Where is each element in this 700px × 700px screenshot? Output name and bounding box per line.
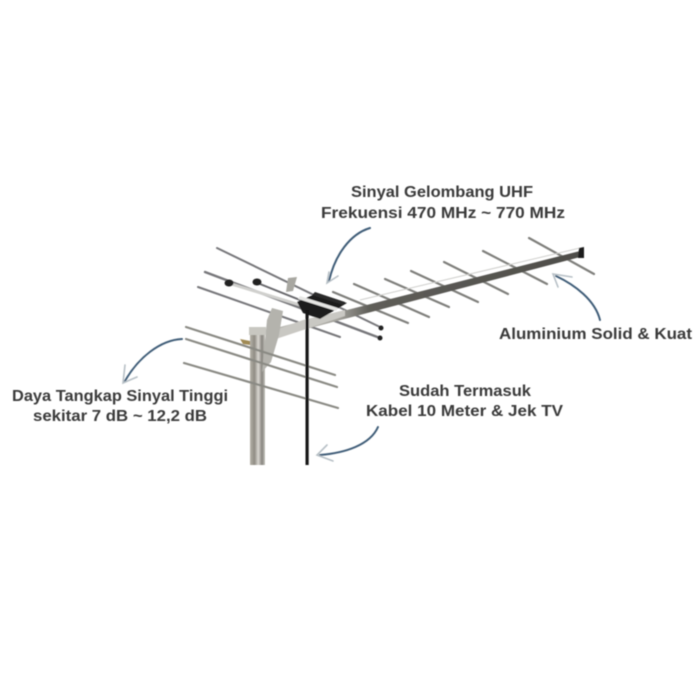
boom top highlight	[360, 248, 580, 300]
boom end cap	[578, 247, 584, 258]
boom	[268, 251, 584, 338]
arrow: signal	[327, 228, 370, 283]
arrow: cable	[317, 427, 378, 461]
cable	[306, 310, 309, 465]
label: cable	[366, 383, 563, 420]
antenna	[184, 238, 594, 465]
bracket	[240, 277, 345, 372]
arrow: gain	[123, 339, 182, 383]
label: gain: Daya Tangkap Sinyal Tinggi	[12, 388, 228, 405]
front long elements	[184, 327, 338, 408]
label: gain: sekitar 7 dB ~ 12,2 dB	[33, 408, 207, 425]
label: cable: Sudah Termasuk	[399, 383, 531, 400]
label: cable: Kabel 10 Meter & Jek TV	[366, 403, 563, 420]
label: gain	[12, 388, 228, 425]
mast	[250, 327, 265, 465]
label: aluminium: Aluminium Solid & Kuat	[499, 326, 693, 343]
element end caps	[224, 278, 384, 340]
arrow: aluminium	[553, 274, 600, 320]
label: signal	[321, 184, 565, 222]
label: signal: Sinyal Gelombang UHF	[351, 184, 533, 201]
amplifier box	[297, 292, 347, 319]
rear long elements	[198, 248, 382, 338]
label: signal: Frekuensi 470 MHz ~ 770 MHz	[321, 205, 565, 222]
director elements	[333, 238, 594, 323]
